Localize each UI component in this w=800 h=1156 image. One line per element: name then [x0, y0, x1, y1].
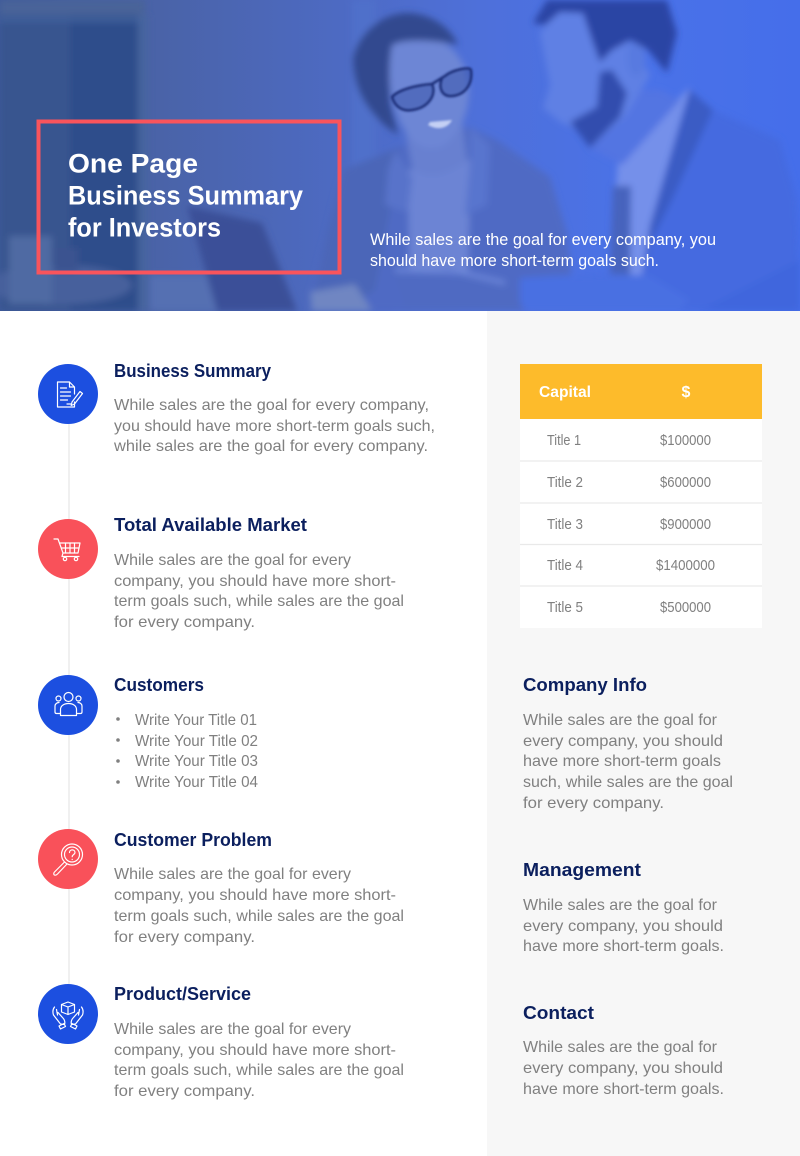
- row 2: [547, 474, 711, 491]
- body text: company, you should have more short-: [114, 1042, 396, 1059]
- section: contact: [523, 1003, 724, 1098]
- body text: term goals such, while sales are the goal: [114, 593, 404, 610]
- icon: people group: [38, 675, 98, 735]
- row 4: $1400000: [656, 557, 715, 574]
- body text: for every company.: [114, 929, 255, 946]
- body text: While sales are the goal for every: [114, 1021, 351, 1038]
- heading: Customer Problem: [114, 830, 272, 850]
- shelf and table: [0, 0, 70, 311]
- man hair: [533, 0, 677, 73]
- hands: [408, 270, 521, 310]
- row 3: Title 3: [547, 516, 583, 533]
- row 2: $600000: [660, 474, 711, 491]
- body text: every company, you should: [523, 733, 723, 750]
- row 5: Title 5: [547, 599, 583, 616]
- section: company info: [523, 675, 733, 812]
- body text: While sales are the goal for: [523, 1039, 718, 1056]
- table header: Capital: [539, 384, 591, 401]
- body text: While sales are the goal for every company,: [114, 397, 429, 414]
- body text: [114, 866, 404, 946]
- man neck and face: [598, 92, 670, 164]
- row 4: Title 4: [547, 557, 583, 574]
- body text: have more short-term goals.: [523, 938, 724, 955]
- body text: you should have more short-term goals such,: [114, 418, 435, 435]
- body text: for every company.: [114, 1083, 255, 1100]
- heading: Customers: [114, 675, 204, 695]
- body text: [114, 1021, 404, 1100]
- body text: while sales are the goal for every company.: [113, 438, 428, 455]
- heading: Contact: [523, 1003, 594, 1023]
- icon: document and pen: [38, 364, 98, 424]
- title line 1: One Page: [68, 148, 198, 178]
- title line 2: Business Summary: [68, 180, 303, 210]
- section: product/service: [38, 984, 404, 1100]
- glasses: [392, 68, 471, 110]
- body text: [114, 552, 404, 631]
- body text: [113, 397, 435, 455]
- row 3: [547, 516, 711, 533]
- heading: Company Info: [523, 675, 647, 695]
- heading: Management: [523, 860, 641, 880]
- table body: [520, 419, 762, 628]
- capital table: [520, 364, 762, 628]
- hero subtitle: should have more short-term goals such.: [370, 252, 659, 270]
- table header: $: [682, 384, 691, 401]
- body text: While sales are the goal for: [523, 897, 718, 914]
- icon: shopping cart: [38, 519, 98, 579]
- row 1: Title 1: [547, 432, 581, 449]
- body text: have more short-term goals: [523, 753, 721, 770]
- bullet list: Write Your Title 01: [135, 712, 257, 729]
- title box: [38, 122, 340, 272]
- section: customers: [38, 675, 258, 791]
- body text: every company, you should: [523, 918, 723, 935]
- row 5: [547, 599, 711, 616]
- row 1: $100000: [660, 432, 711, 449]
- body text: term goals such, while sales are the goal: [114, 908, 404, 925]
- hero banner photo: [0, 0, 800, 311]
- icon: hands holding box: [38, 984, 98, 1044]
- row 1: [547, 432, 711, 449]
- body text: While sales are the goal for: [523, 712, 718, 729]
- heading: Total Available Market: [114, 515, 307, 535]
- row 3: $900000: [660, 516, 711, 533]
- heading: Product/Service: [114, 984, 251, 1004]
- body text: [523, 897, 724, 955]
- body text: for every company.: [114, 614, 255, 631]
- table header: [520, 364, 762, 419]
- woman jacket: [396, 129, 572, 298]
- row 4: [547, 557, 715, 574]
- section: customer problem: [38, 829, 404, 946]
- bullet list: Write Your Title 04: [135, 774, 258, 791]
- body text: While sales are the goal for every: [114, 866, 351, 883]
- hero subtitle: [370, 231, 716, 270]
- red frame: [38, 122, 340, 272]
- row 5: $500000: [660, 599, 711, 616]
- section: management: [523, 860, 724, 955]
- man jacket: [649, 117, 796, 306]
- icon: magnifier with question mark: [38, 829, 98, 889]
- hero subtitle: While sales are the goal for every company, you: [370, 231, 716, 249]
- body text: such, while sales are the goal: [523, 774, 733, 791]
- body text: have more short-term goals.: [523, 1081, 724, 1098]
- body text: term goals such, while sales are the goal: [114, 1062, 404, 1079]
- bullet list: Write Your Title 03: [135, 753, 258, 770]
- title line 3: for Investors: [68, 212, 221, 242]
- timeline connector: [68, 424, 70, 984]
- bullet list: [116, 712, 258, 791]
- bullet list: Write Your Title 02: [135, 733, 258, 750]
- background brightening: [352, 0, 376, 170]
- body text: [523, 1039, 724, 1098]
- right side panel background: [487, 311, 800, 1156]
- section: business summary: [38, 361, 435, 455]
- body text: While sales are the goal for every: [114, 552, 351, 569]
- woman hair: [353, 13, 458, 135]
- body text: company, you should have more short-: [114, 573, 396, 590]
- heading: Business Summary: [114, 361, 271, 381]
- section: total available market: [38, 515, 404, 631]
- body text: every company, you should: [523, 1060, 723, 1077]
- body text: company, you should have more short-: [114, 887, 396, 904]
- woman neck and face: [406, 127, 468, 169]
- body text: [523, 712, 733, 812]
- body text: for every company.: [523, 795, 664, 812]
- row 2: Title 2: [547, 474, 583, 491]
